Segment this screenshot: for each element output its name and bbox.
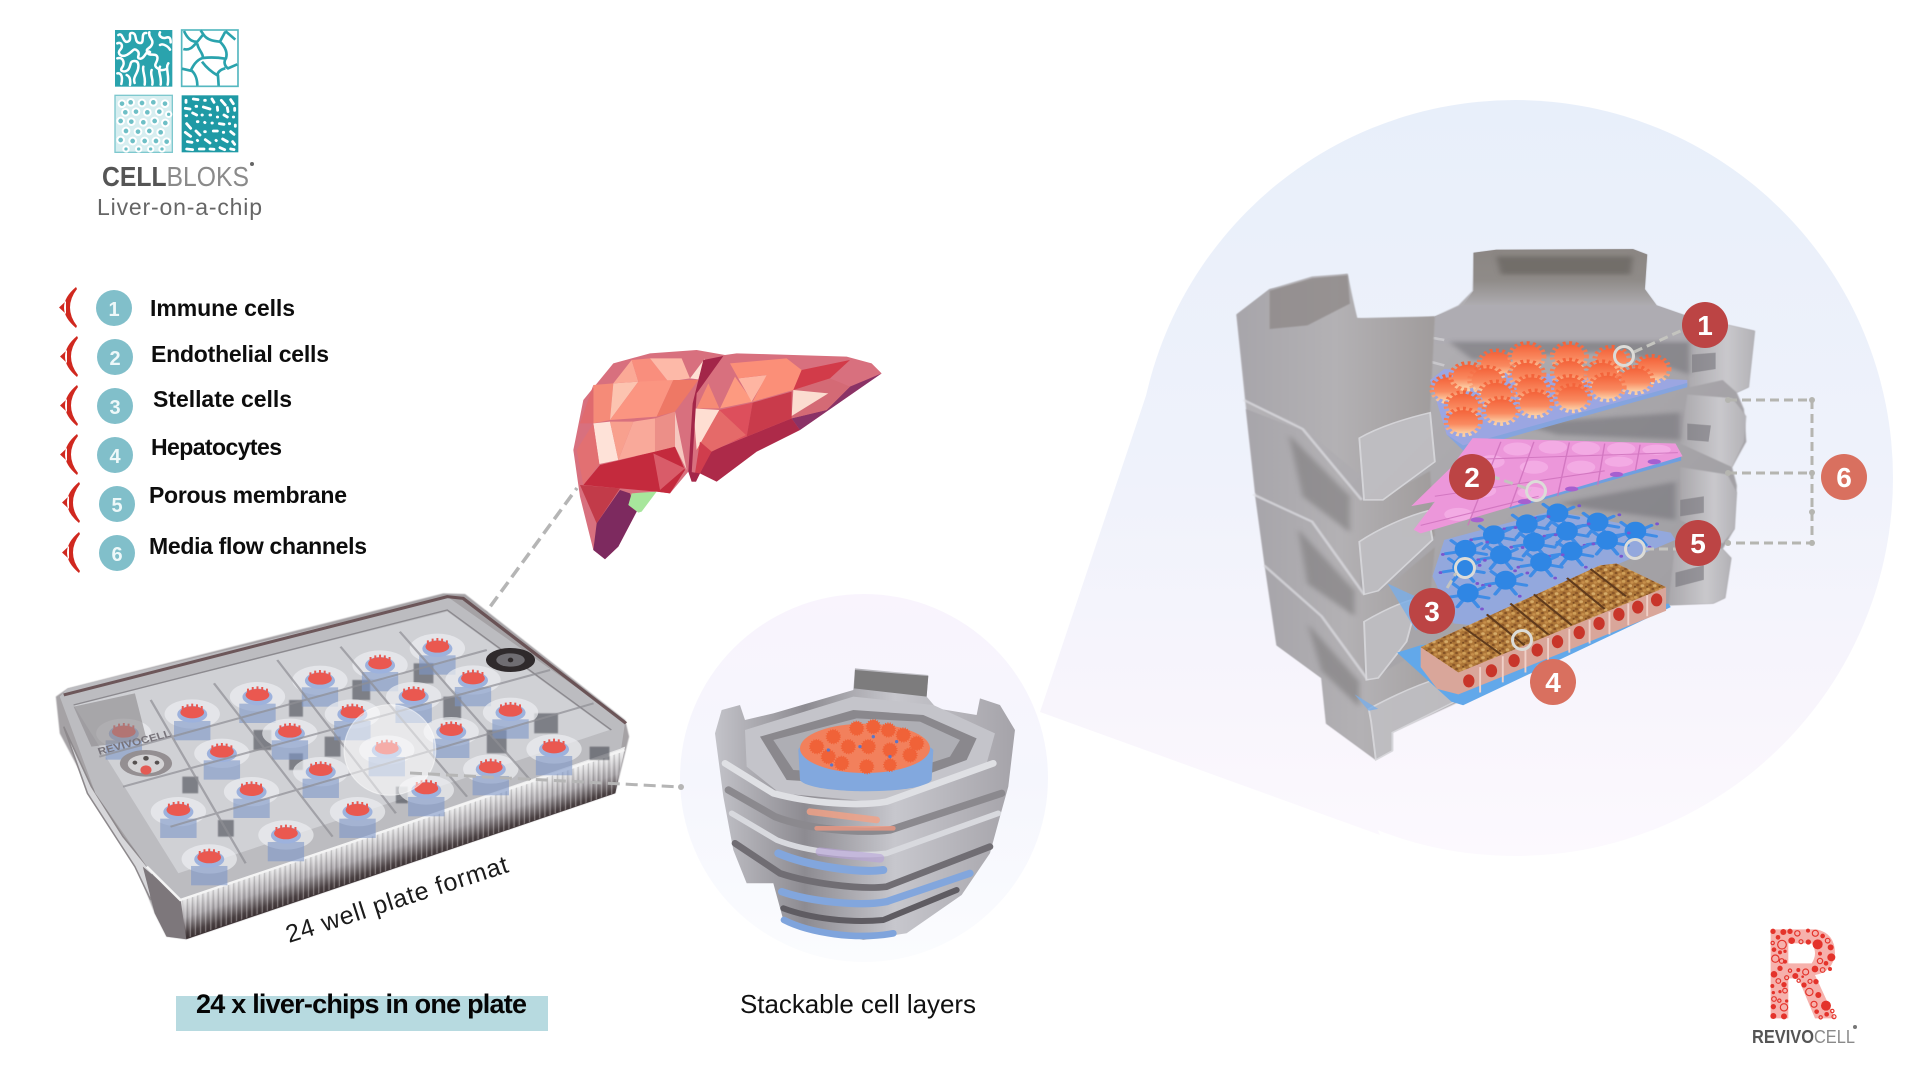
logo: CellBloks <box>97 30 262 220</box>
cell tray: blue rim <box>798 740 933 791</box>
leader line: plate to stack <box>410 773 684 790</box>
illustration: liver <box>573 350 882 559</box>
marker 6: 6 <box>1836 462 1852 493</box>
callout band: 24 x liver-chips in one plate <box>196 989 527 1019</box>
marker 2: 2 <box>1464 462 1480 493</box>
legend item 5: 5 <box>111 495 123 517</box>
cut faces <box>1359 413 1458 760</box>
large magnifier bubble <box>1040 100 1893 856</box>
layer 2: endothelial sheet <box>1411 438 1683 533</box>
legend item 2 <box>60 336 329 377</box>
callout dashed leaders <box>1440 328 1687 672</box>
legend item 6: Media flow channels <box>149 533 367 559</box>
legend item 4: Hepatocytes <box>151 434 282 460</box>
dark mid wall shading <box>1289 434 1359 707</box>
legend item 6 <box>62 532 367 573</box>
leader line: plate to liver <box>416 488 577 708</box>
tile: pale cells <box>115 95 172 152</box>
legend item 4 <box>60 434 282 475</box>
logo tiles <box>115 30 238 152</box>
plate dark interior pieces <box>182 663 609 837</box>
legend item 4: 4 <box>109 446 121 468</box>
legend item 3: 3 <box>109 397 121 419</box>
plate texture mark <box>74 693 147 747</box>
plate side wall <box>180 747 625 939</box>
chamber shadows <box>1449 342 1716 587</box>
left wall layer 2 <box>1246 409 1435 591</box>
left wall layer 3 <box>1256 496 1435 678</box>
layer 4: hepatocytes on membrane <box>1397 564 1671 705</box>
logo: Revivocell <box>1752 929 1857 1047</box>
bracket for media flow channels <box>1725 397 1815 546</box>
legend item 1 <box>59 287 295 328</box>
vent holes <box>120 750 172 777</box>
registered mark <box>250 162 254 166</box>
right arm layer 3 <box>1680 467 1737 544</box>
lens highlight <box>344 705 436 795</box>
legend item 1: 1 <box>108 299 120 321</box>
plate brand mark: REVIVOCELL <box>96 728 173 758</box>
small magnifier bubble <box>680 594 1048 962</box>
stack layer bands <box>725 763 1002 936</box>
marker 1: 1 <box>1697 310 1713 341</box>
layer 3: stellate cells on membrane <box>1432 504 1675 625</box>
chip silhouette <box>1237 249 1755 760</box>
upper rim interior <box>745 697 995 803</box>
top inlet tower <box>1463 249 1657 305</box>
plate left wall <box>143 867 186 939</box>
marker 4 <box>1530 659 1576 705</box>
legend item 5: Porous membrane <box>149 482 347 508</box>
marker 1 <box>1682 302 1728 348</box>
tile: dark blobs <box>182 95 238 152</box>
tile: maze <box>115 30 172 87</box>
legend item 1: Immune cells <box>150 295 295 321</box>
marker 5 <box>1675 520 1721 566</box>
rear dish arcs <box>1256 322 1444 365</box>
legend <box>59 287 367 573</box>
label: 24 well plate format: 24 well plate format <box>282 851 512 949</box>
blue channel slivers <box>1355 584 1435 711</box>
top inlet <box>854 670 928 697</box>
marker 6 <box>1821 454 1867 500</box>
plate side clip <box>64 727 153 900</box>
marker 5: 5 <box>1690 528 1706 559</box>
logo wordmark: CELLBLOKS <box>102 161 249 192</box>
legend item 2: Endothelial cells <box>151 341 329 367</box>
plate lid <box>60 597 625 900</box>
logo wordmark: REVIVOCELL <box>1752 1027 1855 1047</box>
right arm layer 4 <box>1668 540 1731 605</box>
left wall layer 4 <box>1265 565 1458 760</box>
cell tray: orange cells <box>800 724 930 773</box>
left wall layer 1 <box>1237 274 1435 474</box>
marker 2 <box>1449 454 1495 500</box>
legend item 6: 6 <box>111 544 123 566</box>
legend item 5 <box>62 482 347 523</box>
layer separators <box>1244 400 1368 680</box>
plate body <box>56 593 629 939</box>
marker 3 <box>1409 588 1455 634</box>
label: stackable cell layers: Stackable cell layers <box>740 989 976 1019</box>
legend item 3: Stellate cells <box>153 386 292 412</box>
plate wells <box>96 634 582 885</box>
logo subtitle: Liver-on-a-chip <box>97 194 262 220</box>
legend item 3 <box>60 385 292 426</box>
registered mark <box>1853 1025 1857 1029</box>
tile: cell network <box>182 30 238 86</box>
callout band <box>176 989 548 1031</box>
callout rings <box>1456 346 1644 650</box>
right arm layer 1 <box>1685 315 1755 393</box>
marker 4: 4 <box>1545 667 1561 698</box>
stack silhouette <box>715 668 1015 940</box>
illustration: stackable cell layers <box>715 668 1015 940</box>
logo mark: dotted R <box>1770 929 1836 1019</box>
right arm layer 2 <box>1680 394 1746 467</box>
legend item 2: 2 <box>109 348 121 370</box>
layer 1: immune cells on membrane <box>1430 343 1687 450</box>
marker 3: 3 <box>1424 596 1440 627</box>
illustration: 24 well plate <box>56 593 629 939</box>
illustration: exploded liver-chip layers <box>1237 249 1755 760</box>
